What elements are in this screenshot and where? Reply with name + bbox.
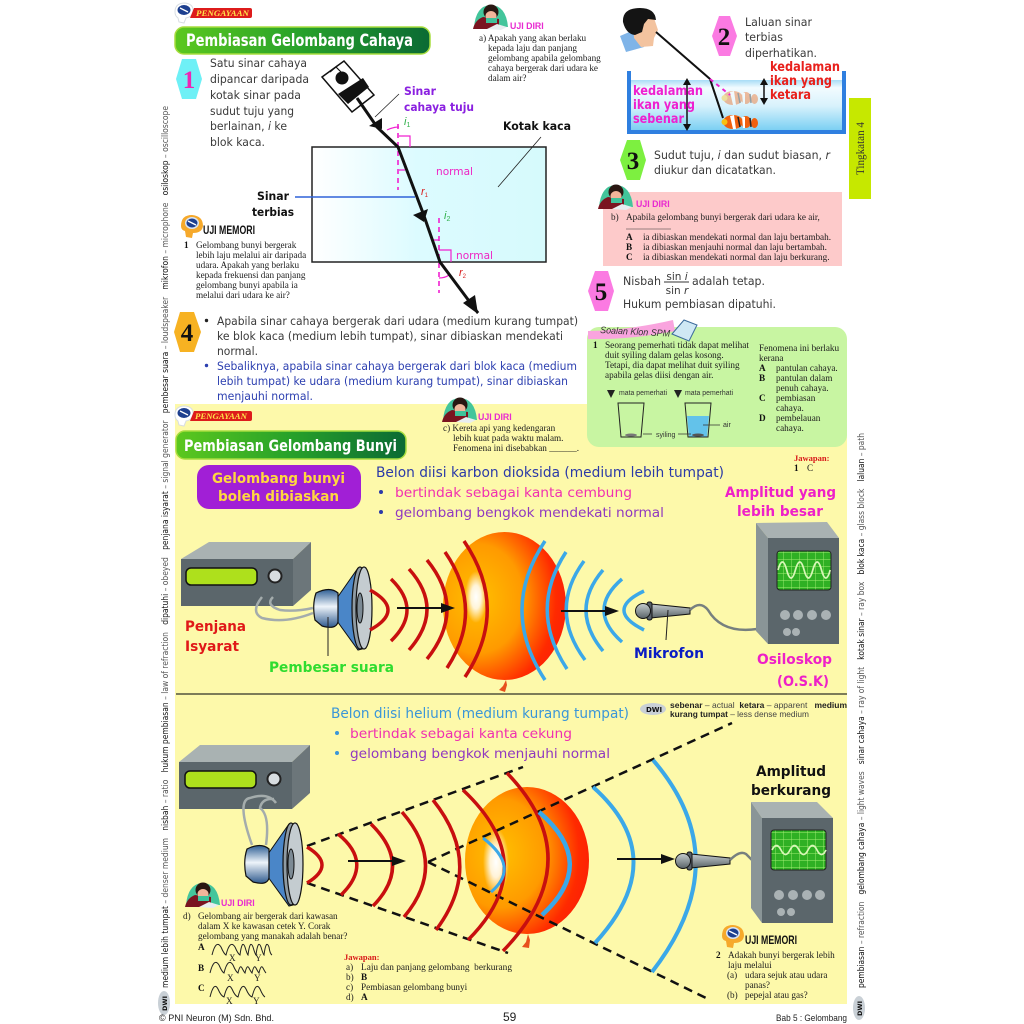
quiz: Uji Diri d: X bbox=[226, 996, 233, 1006]
step 5 text: Hukum pembiasan dipatuhi. bbox=[623, 297, 776, 311]
loudspeaker 1 bbox=[314, 567, 372, 650]
answers: Jawapan: Jawapan: bbox=[344, 952, 380, 962]
step 2 hexagon: 2 bbox=[718, 24, 730, 51]
answers: Jawapan: c) bbox=[346, 982, 353, 992]
answer: Jawapan 1 bbox=[794, 453, 830, 473]
quiz: Uji Memori 1: udara. Apakah yang berlaku bbox=[196, 260, 299, 270]
quiz: Uji Memori 1: UJI MEMORI bbox=[203, 223, 255, 237]
text: helium balloon: bertindak sebagai kanta cekung bbox=[350, 726, 572, 742]
quiz: Uji Memori 1: 1 bbox=[184, 240, 189, 250]
text: helium balloon bbox=[331, 706, 629, 762]
step 4 hexagon bbox=[174, 312, 201, 352]
microphone 1 bbox=[636, 602, 690, 620]
step 5 text: Nisbah bbox=[623, 274, 661, 288]
normals and angle marks bbox=[387, 124, 451, 293]
quiz: Uji Memori 1: melalui dari udara ke air? bbox=[196, 290, 290, 300]
balloon: carbon dioxide bbox=[443, 532, 566, 692]
step 5 hexagon: 5 bbox=[595, 279, 607, 306]
label: sinar cahaya tuju: Sinar bbox=[404, 84, 436, 98]
step 1 text: blok kaca. bbox=[210, 135, 265, 149]
panel: Soalan Klon SPM: Tetapi, dia dapat melihat duit syiling bbox=[605, 360, 740, 370]
label: mikrofon: Mikrofon bbox=[634, 646, 704, 662]
arrow: waves in 2 bbox=[348, 856, 406, 866]
blue wave fronts 1 bbox=[522, 541, 644, 680]
answer: Jawapan 1: C bbox=[807, 463, 813, 473]
quiz: Uji Memori 2 bbox=[716, 925, 835, 1000]
step 5 hexagon bbox=[588, 271, 614, 311]
arrow: waves in bbox=[397, 603, 455, 613]
label: sinar terbias: Sinar bbox=[257, 189, 289, 203]
quiz: Uji Memori 2: 2 bbox=[716, 950, 721, 960]
quiz: Uji Memori 1: gelombang bunyi apabila ia bbox=[196, 280, 298, 290]
label: osiloskop: (O.S.K) bbox=[777, 674, 829, 690]
sight ray bbox=[656, 32, 730, 118]
angle labels: 1 bbox=[406, 122, 410, 129]
step 2 text: Laluan sinar bbox=[745, 15, 812, 29]
quiz: Uji Diri d: gelombang yang manakah adalah benar? bbox=[198, 931, 348, 941]
label: kotak kaca: Kotak kaca bbox=[503, 119, 571, 133]
quiz: Uji Diri d: Y bbox=[255, 953, 262, 963]
depth arrow: real bbox=[683, 78, 691, 131]
title: Pembiasan Gelombang Bunyi bbox=[176, 431, 406, 459]
banner: Soalan Klon SPM bbox=[588, 320, 697, 341]
DWI badge left: DWI bbox=[161, 996, 169, 1011]
panel: Soalan Klon SPM: mata pemerhati bbox=[685, 390, 733, 397]
label: amplitud yang lebih besar bbox=[725, 485, 836, 520]
label: kedalaman ikan yang ketara: ketara bbox=[770, 88, 811, 103]
text: helium balloon: gelombang bengkok menjauhi normal bbox=[350, 746, 610, 762]
label: normal 1: normal bbox=[436, 166, 473, 178]
quiz: Uji Diri a: dalam air? bbox=[488, 73, 527, 83]
step 1 text: sudut tuju yang bbox=[210, 104, 294, 118]
tab: Tingkatan 4: Tingkatan 4 bbox=[855, 122, 867, 175]
step 4 text: ke blok kaca (medium lebih tumpat), sinar dibiaskan mendekati bbox=[217, 329, 563, 343]
step 3 text: Sudut tuju, i dan sudut biasan, r bbox=[654, 148, 831, 162]
DWI note bbox=[640, 700, 847, 719]
ray box bbox=[322, 61, 374, 112]
quiz: Uji Memori 2: laju melalui bbox=[728, 960, 772, 970]
panel: Soalan Klon SPM: pantulan cahaya. bbox=[776, 363, 838, 373]
label: sinar terbias bbox=[252, 189, 294, 219]
vertical glossary: left: medium lebih tumpat – denser medium nisbah – ratio hukum pembiasan – law of refraction dipatuhi – obeyed penjana isyarat – signal generator pembesar suara – loudspeaker mikrofon – microphone osiloskop – oscilloscope bbox=[161, 106, 171, 988]
answers: Jawapan: A bbox=[361, 992, 368, 1002]
step 3 text: diukur dan dicatatkan. bbox=[654, 163, 776, 177]
callout: Gelombang bunyi boleh dibiaskan: Gelombang bunyi bbox=[212, 471, 345, 487]
quiz: Uji Diri d: Gelombang air bergerak dari kawasan bbox=[198, 911, 338, 921]
label: penjana isyarat bbox=[185, 619, 246, 655]
step 1 hexagon: 1 bbox=[183, 67, 195, 94]
refracted ray leader bbox=[295, 196, 415, 198]
label: amplitud berkurang: Amplitud bbox=[756, 764, 826, 780]
red wave fronts 2 bbox=[307, 773, 548, 951]
panel: Soalan Klon SPM: D bbox=[759, 413, 766, 423]
callout: Gelombang bunyi boleh dibiaskan: boleh dibiaskan bbox=[218, 489, 339, 505]
tag: Pengayaan 2: PENGAYAAN bbox=[195, 411, 248, 421]
arrow: waves out 2 bbox=[617, 854, 675, 864]
DWI badge right: DWI bbox=[856, 1001, 864, 1016]
quiz: Uji Diri a: cahaya bergerak dari udara ke bbox=[488, 63, 598, 73]
footer: publisher: © PNI Neuron (M) Sdn. Bhd. bbox=[159, 1013, 274, 1024]
DWI badge left bbox=[158, 991, 170, 1015]
quiz: Uji Diri d: B bbox=[198, 963, 204, 973]
quiz: Uji Diri d: Y bbox=[254, 973, 261, 983]
quiz: Uji Memori 1: Gelombang bunyi bergerak bbox=[196, 240, 297, 250]
step 1 text: kotak sinar pada bbox=[210, 88, 301, 102]
quiz: Uji Diri d: UJI DIRI bbox=[221, 898, 255, 908]
step 1 text bbox=[210, 56, 309, 149]
banner: Soalan Klon SPM: Soalan Klon SPM bbox=[600, 325, 670, 340]
label: penjana isyarat: Isyarat bbox=[185, 639, 239, 655]
step 4 hexagon: 4 bbox=[181, 320, 194, 347]
quiz: Uji Diri a: kepada laju dan panjang bbox=[488, 43, 577, 53]
leader: speaker bbox=[327, 617, 329, 656]
quiz: Uji Memori 1: kepada frekuensi dan panjang bbox=[196, 270, 306, 280]
step 5 text: sin i bbox=[666, 271, 688, 283]
callout: Gelombang bunyi boleh dibiaskan bbox=[197, 465, 361, 509]
red wave fronts 1 bbox=[370, 541, 487, 677]
panel: Soalan Klon SPM: kerana bbox=[759, 353, 783, 363]
leader lines bbox=[375, 94, 541, 187]
title: Pembiasan Gelombang Bunyi: Pembiasan Gelombang Bunyi bbox=[184, 436, 397, 455]
mic cable 2 bbox=[730, 853, 752, 860]
panel: Soalan Klon SPM: mata pemerhati bbox=[619, 390, 667, 397]
quiz: Uji Diri d bbox=[183, 882, 348, 1006]
panel: Soalan Klon SPM: syiling bbox=[656, 432, 676, 439]
oscilloscope 1 bbox=[756, 522, 839, 644]
panel: Uji Diri b: ia dibiaskan menjauhi normal dan laju bertambah. bbox=[643, 242, 827, 252]
label: kedalaman ikan yang ketara: ikan yang bbox=[770, 74, 832, 89]
panel: Soalan Klon SPM: pembiasan bbox=[776, 393, 816, 403]
DWI note: sebenar – actual ketara – apparent medium bbox=[670, 700, 847, 710]
panel: Soalan Klon SPM: pembelauan bbox=[776, 413, 821, 423]
answer: Jawapan 1: Jawapan: bbox=[794, 453, 830, 463]
angle labels: r bbox=[459, 267, 463, 279]
quiz: Uji Memori 2: udara sejuk atau udara bbox=[745, 970, 827, 980]
DWI note: DWI bbox=[646, 706, 662, 714]
label: amplitud berkurang: berkurang bbox=[751, 783, 831, 799]
water tank bbox=[629, 71, 844, 132]
panel: Uji Diri b: UJI DIRI bbox=[636, 199, 670, 209]
panel: Uji Diri b: Apabila gelombang bunyi bergerak dari udara ke air, bbox=[626, 212, 820, 222]
microphone 2 bbox=[676, 852, 730, 870]
angle labels: 2 bbox=[446, 216, 450, 223]
tag: Pengayaan 2 bbox=[175, 406, 252, 426]
answers: Jawapan: Pembiasan gelombang bunyi bbox=[361, 982, 468, 992]
label: pembesar suara: Pembesar suara bbox=[269, 660, 394, 676]
answers: Jawapan bbox=[344, 952, 512, 1002]
step 1 text: dipancar daripada bbox=[210, 72, 309, 86]
step 3 hexagon: 3 bbox=[627, 148, 639, 175]
angle labels: r bbox=[421, 186, 425, 198]
DWI badge right bbox=[853, 996, 865, 1020]
balloon: helium bbox=[465, 787, 589, 948]
fish: apparent bbox=[722, 91, 758, 105]
panel: Uji Diri b: B bbox=[626, 242, 632, 252]
quiz: Uji Diri a: gelombang apabila gelombang bbox=[488, 53, 601, 63]
quiz: Uji Memori 2: (a) bbox=[727, 970, 737, 980]
label: sinar cahaya tuju: cahaya tuju bbox=[404, 100, 474, 114]
step 3 hexagon bbox=[620, 140, 646, 180]
angle labels: i bbox=[404, 116, 406, 128]
label: normal 2: normal bbox=[456, 250, 493, 262]
text: helium balloon: Belon diisi helium (medium kurang tumpat) bbox=[331, 706, 629, 722]
panel: Uji Diri b: A bbox=[626, 232, 633, 242]
panel: Soalan Klon SPM: penuh cahaya. bbox=[776, 383, 829, 393]
panel: Soalan Klon SPM: air bbox=[723, 422, 731, 429]
label: kedalaman ikan yang sebenar bbox=[633, 84, 703, 127]
step 2 hexagon bbox=[712, 16, 737, 56]
quiz: Uji Diri d: C bbox=[198, 983, 205, 993]
cables 2 bbox=[243, 796, 276, 845]
step 2 text: terbias bbox=[745, 30, 783, 44]
quiz: Uji Diri d: dalam X ke kawasan cetek Y. Corak bbox=[198, 921, 331, 931]
panel: Soalan Klon SPM: apabila gelas diisi dengan air. bbox=[605, 370, 713, 380]
panel: Soalan Klon SPM: C bbox=[759, 393, 766, 403]
title: Pembiasan Gelombang Cahaya: Pembiasan Gelombang Cahaya bbox=[186, 31, 413, 50]
panel: Soalan Klon SPM: B bbox=[759, 373, 765, 383]
panel: Soalan Klon SPM: Fenomena ini berlaku bbox=[759, 343, 840, 353]
quiz: Uji Diri a bbox=[473, 4, 601, 83]
angle labels: i bbox=[444, 210, 446, 222]
panel: Uji Diri b: C bbox=[626, 252, 633, 262]
step 5 text: adalah tetap. bbox=[692, 274, 765, 288]
panel: Soalan Klon SPM: 1 bbox=[593, 340, 598, 350]
answers: Jawapan: Laju dan panjang gelombang berkurang bbox=[361, 962, 512, 972]
angle labels: 2 bbox=[463, 274, 467, 280]
panel: Uji Diri b: ia dibiaskan mendekati normal dan laju berkurang. bbox=[643, 252, 830, 262]
step 1 text: Satu sinar cahaya bbox=[210, 56, 307, 70]
answers: Jawapan: B bbox=[361, 972, 367, 982]
light ray with arrows bbox=[357, 98, 478, 314]
panel: Uji Diri b: b) bbox=[611, 212, 619, 222]
label: amplitud berkurang bbox=[751, 764, 831, 799]
quiz: Uji Diri c bbox=[442, 398, 579, 453]
section divider bbox=[176, 693, 847, 695]
tag: Pengayaan 1: PENGAYAAN bbox=[196, 8, 250, 18]
label: osiloskop bbox=[757, 652, 832, 690]
title: Pembiasan Gelombang Cahaya bbox=[175, 27, 430, 54]
text: carbon dioxide balloon bbox=[376, 465, 724, 521]
answer: Jawapan 1: 1 bbox=[794, 463, 799, 473]
observer head bbox=[620, 8, 658, 52]
step 3 text bbox=[654, 148, 831, 177]
text: carbon dioxide balloon: bertindak sebagai kanta cembung bbox=[395, 485, 632, 501]
quiz: Uji Diri c: UJI DIRI bbox=[478, 412, 512, 422]
step 1 hexagon bbox=[176, 59, 202, 99]
oscilloscope 2 bbox=[751, 802, 833, 923]
step 1 text: berlainan, i ke bbox=[210, 119, 287, 133]
label: kedalaman ikan yang sebenar: sebenar bbox=[633, 112, 684, 127]
label: kedalaman ikan yang ketara: kedalaman bbox=[770, 60, 840, 75]
label: osiloskop: Osiloskop bbox=[757, 652, 832, 668]
label: sinar terbias: terbias bbox=[252, 205, 294, 219]
panel: Soalan Klon SPM: cahaya. bbox=[776, 423, 804, 433]
angle labels: 1 bbox=[425, 193, 429, 199]
quiz: Uji Diri d: Y bbox=[253, 996, 260, 1006]
quiz: Uji Diri c: lebih kuat pada waktu malam. bbox=[453, 433, 563, 443]
label: sinar cahaya tuju bbox=[404, 84, 474, 114]
loudspeaker 2 bbox=[245, 823, 303, 906]
footer: page number: 59 bbox=[503, 1010, 517, 1024]
DWI note: kurang tumpat – less dense medium bbox=[670, 709, 809, 719]
answers: Jawapan: b) bbox=[346, 972, 354, 982]
panel: Soalan Klon SPM: A bbox=[759, 363, 766, 373]
answers: Jawapan: a) bbox=[346, 962, 353, 972]
answers: Jawapan: d) bbox=[346, 992, 354, 1002]
fish: real bbox=[722, 115, 758, 129]
panel: Soalan Klon SPM: pantulan dalam bbox=[776, 373, 832, 383]
step 4 text: Apabila sinar cahaya bergerak dari udara (medium kurang tumpat) bbox=[217, 314, 578, 328]
quiz: Uji Diri d: d) bbox=[183, 911, 191, 921]
quiz: Uji Diri d: X bbox=[227, 973, 234, 983]
quiz: Uji Diri a: a) Apakah yang akan berlaku bbox=[479, 33, 587, 43]
quiz: Uji Diri c: c) Kereta api yang kedengaran bbox=[443, 423, 556, 433]
label: kedalaman ikan yang sebenar: ikan yang bbox=[633, 98, 695, 113]
step 4 text: lebih tumpat) ke udara (medium kurang tumpat), sinar dibiaskan bbox=[217, 374, 568, 388]
panel: Soalan Klon SPM: duit syiling dalam gelas kosong. bbox=[605, 350, 724, 360]
mic cable 1 bbox=[690, 605, 757, 630]
cables 1 bbox=[256, 597, 313, 620]
blue wave fronts 2 bbox=[483, 760, 696, 972]
footer: chapter: Bab 5 : Gelombang bbox=[776, 1013, 847, 1024]
quiz: Uji Memori 2: UJI MEMORI bbox=[745, 933, 797, 947]
signal generator 1 bbox=[181, 542, 311, 606]
depth arrow: apparent bbox=[760, 78, 768, 105]
panel: Soalan Klon SPM: Seorang pemerhati tidak dapat melihat bbox=[605, 340, 749, 350]
arrow: waves out bbox=[561, 606, 619, 616]
step 4 text: menjauhi normal. bbox=[217, 389, 313, 403]
tag: Pengayaan 1 bbox=[175, 3, 252, 23]
quiz: Uji Diri a: UJI DIRI bbox=[510, 21, 544, 31]
panel: Uji Diri b: ia dibiaskan mendekati normal dan laju bertambah. bbox=[643, 232, 831, 242]
angle labels bbox=[404, 116, 467, 280]
step 5 text bbox=[623, 271, 776, 311]
quiz: Uji Memori 1: lebih laju melalui air daripada bbox=[196, 250, 306, 260]
vertical glossary: right: pembiasan – refraction gelombang cahaya – light waves sinar cahaya – ray of light kotak sinar – ray box blok kaca – glass block laluan – path bbox=[857, 433, 867, 988]
label: amplitud yang lebih besar: Amplitud yang bbox=[725, 485, 836, 501]
panel: Uji Diri b bbox=[598, 184, 842, 266]
quiz: Uji Memori 2: (b) bbox=[727, 990, 738, 1000]
panel: Soalan Klon SPM: cahaya. bbox=[776, 403, 804, 413]
tab: Tingkatan 4 bbox=[849, 98, 871, 199]
text: carbon dioxide balloon: gelombang bengkok mendekati normal bbox=[395, 505, 664, 521]
yellow panel: sound refraction bbox=[175, 404, 847, 1004]
dashed cone lines bbox=[307, 723, 732, 999]
step 5 text: sin r bbox=[666, 285, 689, 297]
quiz: Uji Diri c: Fenomena ini disebabkan ______. bbox=[453, 443, 579, 453]
label: penjana isyarat: Penjana bbox=[185, 619, 246, 635]
text: carbon dioxide balloon: Belon diisi karbon dioksida (medium lebih tumpat) bbox=[376, 465, 724, 481]
step 4 text: Sebaliknya, apabila sinar cahaya bergerak dari blok kaca (medium bbox=[217, 359, 577, 373]
quiz: Uji Memori 1 bbox=[181, 215, 306, 300]
quiz: Uji Diri d: X bbox=[229, 953, 236, 963]
glass block bbox=[312, 147, 546, 262]
quiz: Uji Memori 2: panas? bbox=[745, 980, 770, 990]
quiz: Uji Memori 2: Adakah bunyi bergerak lebih bbox=[728, 950, 835, 960]
step 4 text bbox=[205, 314, 578, 403]
step 2 text: diperhatikan. bbox=[745, 46, 817, 60]
quiz: Uji Memori 2: pepejal atau gas? bbox=[745, 990, 808, 1000]
label: kedalaman ikan yang sebenar: kedalaman bbox=[633, 84, 703, 99]
step 2 text bbox=[745, 15, 817, 60]
signal generator 2 bbox=[179, 745, 310, 809]
label: kedalaman ikan yang ketara bbox=[770, 60, 840, 103]
step 4 text: normal. bbox=[217, 344, 258, 358]
leader: mikrofon bbox=[666, 610, 668, 640]
panel: Soalan Klon SPM bbox=[587, 320, 847, 447]
label: amplitud yang lebih besar: lebih besar bbox=[737, 504, 823, 520]
quiz: Uji Diri d: A bbox=[198, 942, 205, 952]
